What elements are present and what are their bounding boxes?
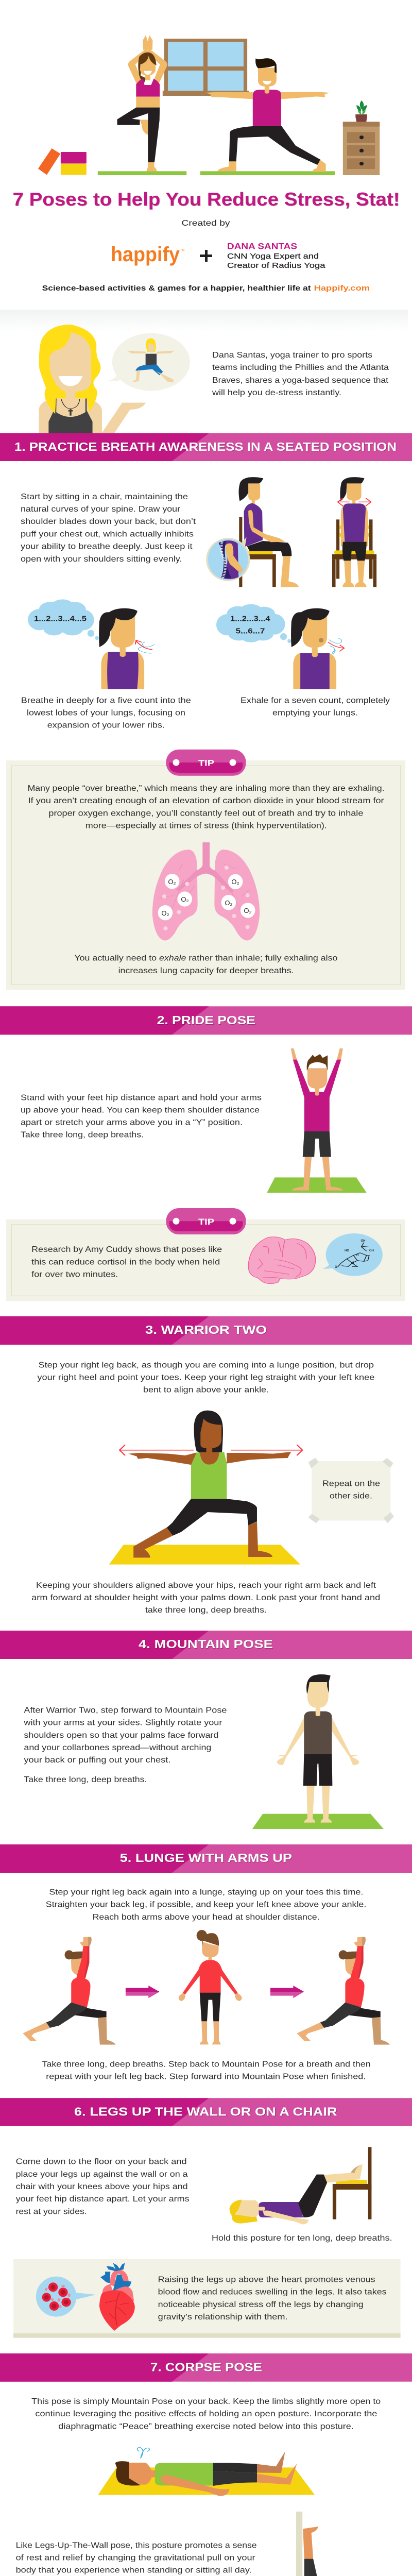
- corpse pose instructions: This pose is simply Mountain Pose on your back. Keep the limbs slightly more open to: [31, 2397, 381, 2406]
- section 1 instructions: puff your chest out, which actually inhibits: [21, 530, 194, 539]
- banner: section 2: 2. PRIDE POSE: [157, 1013, 255, 1027]
- seated figure, side view: [239, 477, 299, 587]
- intro text: Braves, shares a yoga-based sequence that: [212, 376, 389, 385]
- banner: section 4: 4. MOUNTAIN POSE: [139, 1637, 273, 1651]
- Dana Santas credit: [227, 241, 325, 270]
- lunge instructions: Straighten your back leg, if possible, and keep your left knee above your ankle.: [46, 1901, 366, 1909]
- Dana Santas credit: CNN Yoga Expert and: [227, 252, 319, 261]
- warrior two instructions: bent to align above your ankle.: [143, 1386, 269, 1395]
- sticky note: other side.: [330, 1492, 372, 1500]
- mountain pose instructions: and your collarbones spread—without arching: [24, 1743, 211, 1752]
- pride pose instructions: Stand with your feet hip distance apart and hold your arms: [21, 1093, 262, 1102]
- tip badge: TIP: [198, 758, 214, 768]
- warrior two follow-up: Keeping your shoulders aligned above your hips, reach your right arm back and left: [36, 1581, 376, 1590]
- lungs diagram: O₂: [168, 878, 176, 886]
- corpse pose instructions: continue leveraging the positive effects of holding an open posture. Incorporate the: [35, 2410, 377, 2418]
- mountain pose instructions: your back or puffing out your chest.: [24, 1756, 170, 1765]
- banner: section 1: [0, 433, 412, 461]
- banner: section 7: [0, 2353, 412, 2382]
- banner: section 3: 3. WARRIOR TWO: [145, 1323, 267, 1336]
- warrior two follow-up: [31, 1581, 380, 1615]
- intro text: [212, 351, 389, 397]
- mountain pose instructions: shoulders open so that your palms face forward: [24, 1731, 218, 1740]
- banner: section 7: 7. CORPSE POSE: [150, 2361, 262, 2374]
- happify logo: TM: [180, 249, 184, 252]
- yoga blocks: [38, 148, 87, 175]
- tagline: Happify.com: [314, 284, 370, 293]
- brain icon and cortisol bubble: OH: [369, 1249, 374, 1252]
- created by: Created by: [181, 219, 230, 228]
- lungs diagram: O₂: [244, 907, 252, 914]
- warrior two follow-up: take three long, deep breaths.: [145, 1606, 267, 1615]
- lunge instructions: [46, 1888, 366, 1922]
- lunge follow-up: repeat with your left leg back. Step forward into Mountain Pose when finished.: [46, 2073, 366, 2081]
- mountain pose instructions: [23, 1706, 227, 1784]
- count labels: 1...2...3...4...5: [34, 614, 87, 623]
- window: [163, 39, 249, 96]
- warrior two instructions: [37, 1361, 375, 1395]
- man in warrior pose: [205, 58, 330, 172]
- inhale caption: lowest lobes of your lungs, focusing on: [27, 709, 185, 718]
- banner: section 6: 6. LEGS UP THE WALL OR ON A CHAIR: [74, 2105, 337, 2119]
- corpse pose instructions: diaphragmatic “Peace” breathing exercise noted below into this posture.: [58, 2422, 354, 2431]
- corpse pose figure on mat: [98, 2447, 315, 2496]
- hold caption: Hold this posture for ten long, deep breaths.: [212, 2234, 392, 2243]
- lungs diagram: O₂: [225, 899, 233, 907]
- tip text: [31, 1245, 222, 1279]
- banner: section 4: [0, 1631, 412, 1659]
- brain icon and cortisol bubble: H: [352, 1262, 354, 1265]
- banner: section 5: 5. LUNGE WITH ARMS UP: [120, 1851, 292, 1865]
- legs up instructions: [16, 2158, 190, 2216]
- happify logo: happify: [111, 243, 180, 266]
- tip badge: TIP: [198, 1217, 214, 1227]
- exhale caption: [241, 696, 390, 718]
- mountain pose instructions: After Warrior Two, step forward to Mountain Pose: [24, 1706, 227, 1715]
- mountain pose instructions: Take three long, deep breaths.: [24, 1775, 147, 1784]
- seated figure, front view: [332, 477, 376, 587]
- wall pose text: [16, 2541, 257, 2575]
- credits: happify and Dana Santas: [111, 241, 325, 270]
- pride pose instructions: apart or stretch your arms above you in a “Y” position.: [21, 1118, 243, 1127]
- tip text: Many people “over breathe,” which means they are inhaling more than they are exhaling.: [28, 784, 385, 793]
- tip conclusion: [74, 954, 338, 975]
- sticky note: [308, 1458, 394, 1523]
- hero illustration: yoga couple in room: [38, 35, 380, 175]
- exhale caption: emptying your lungs.: [272, 709, 358, 718]
- mountain pose instructions: with your arms at your sides. Slightly rotate your: [23, 1719, 222, 1727]
- sequence arrow: [126, 1986, 160, 1998]
- banner: section 1: 1. PRACTICE BREATH AWARENESS IN A SEATED POSITION: [14, 440, 397, 453]
- legs up instructions: Come down to the floor on your back and: [16, 2158, 187, 2166]
- dresser with plant: [343, 100, 380, 175]
- tip panel: over-breathing: [6, 750, 405, 990]
- tagline: Science-based activities & games for a happier, healthier life at: [42, 284, 311, 293]
- lungs diagram: O₂: [161, 909, 169, 917]
- tip badge: [166, 750, 246, 776]
- lungs diagram: [152, 842, 260, 941]
- section 1 instructions: your ability to breathe deeply. Just keep it: [21, 543, 193, 551]
- tip text: [28, 784, 385, 830]
- brain icon and cortisol bubble: HO: [345, 1249, 349, 1252]
- pride pose instructions: [21, 1093, 262, 1140]
- legs on chair figure: [229, 2147, 371, 2224]
- legs up instructions: place your legs up against the wall or on a: [16, 2170, 188, 2179]
- section 1 instructions: shoulder blades down your back, but don’t: [21, 517, 196, 526]
- count labels: 5...6...7: [236, 626, 265, 635]
- tip text: proper oxygen exchange, you’ll constantly feel out of breath and try to inhale: [48, 809, 364, 818]
- tip conclusion: increases lung capacity for deeper breaths.: [118, 967, 294, 975]
- title: 7 Poses to Help You Reduce Stress, Stat!: [12, 189, 400, 210]
- intro text: teams including the Phillies and the Atlanta: [212, 363, 389, 372]
- tip badge: [166, 1208, 246, 1234]
- lunge follow-up: Take three long, deep breaths. Step back to Mountain Pose for a breath and then: [42, 2060, 371, 2069]
- wall pose text: of rest and relief by changing the gravitational pull on your: [16, 2554, 255, 2563]
- lungs diagram: O₂: [231, 878, 239, 886]
- banner: section 5: [0, 1844, 412, 1873]
- legs up instructions: rest at your sides.: [16, 2207, 87, 2216]
- exhale caption: Exhale for a seven count, completely: [241, 696, 390, 705]
- lunge figure, right leg back: [23, 1937, 115, 2045]
- banner: section 6: [0, 2098, 412, 2126]
- inhale caption: Breathe in deeply for a five count into the: [21, 696, 191, 705]
- warrior two instructions: Step your right leg back, as though you are coming into a lunge position, but drop: [38, 1361, 374, 1369]
- pride pose instructions: up above your head. You can keep them shoulder distance: [21, 1106, 260, 1114]
- lunge instructions: Reach both arms above your head at shoulder distance.: [93, 1913, 320, 1922]
- lungs diagram: O₂: [181, 895, 189, 903]
- brain icon and cortisol bubble: [248, 1233, 383, 1284]
- legs up the wall figure: [296, 2512, 397, 2576]
- heart and blood cells: [36, 2263, 135, 2331]
- lunge figure, left leg back: [297, 1937, 390, 2045]
- seated figures and breathing diagrams: [28, 477, 376, 689]
- brain icon and cortisol bubble: OH: [360, 1240, 366, 1243]
- tip text: for over two minutes.: [31, 1270, 118, 1279]
- section 1 instructions: [21, 493, 196, 564]
- plus sign: [200, 250, 212, 262]
- blood flow text: blood flow and reduces swelling in the legs. It also takes: [158, 2288, 387, 2297]
- inhale: thought bubble and figure: [28, 599, 154, 689]
- wall pose text: body that you experience when standing or sitting all day.: [16, 2566, 252, 2575]
- sequence arrow: [270, 1986, 304, 1998]
- blood flow text: noticeable physical stress off the legs by changing: [158, 2300, 364, 2309]
- Dana Santas illustration: [39, 325, 190, 433]
- warrior two follow-up: arm forward at shoulder height with your palms down. Look past your front hand and: [31, 1594, 380, 1602]
- count labels: 1...2...3...4: [230, 614, 270, 623]
- banner: section 2: [0, 1006, 412, 1035]
- woman in tree pose: [117, 35, 167, 171]
- tip conclusion: You actually need to exhale rather than inhale; fully exhaling also: [74, 954, 338, 963]
- legs up instructions: your feet hip distance apart. Let your arms: [16, 2195, 190, 2204]
- legs up instructions: chair with your knees above your hips and: [16, 2182, 188, 2191]
- intro text: will help you de-stress instantly.: [212, 388, 341, 397]
- panel: blood flow: [13, 2259, 401, 2338]
- exhale: thought bubble and figure: [216, 604, 344, 689]
- intro panel gradient: [0, 310, 408, 331]
- Dana Santas credit: Creator of Radius Yoga: [227, 261, 325, 270]
- pride pose figure: [267, 1048, 367, 1193]
- blood flow text: Raising the legs up above the heart promotes venous: [158, 2276, 375, 2284]
- wall pose text: Like Legs-Up-The-Wall pose, this posture promotes a sense: [16, 2541, 257, 2550]
- section 1 instructions: open with your shoulders sitting evenly.: [21, 555, 182, 564]
- corpse pose instructions: [31, 2397, 381, 2431]
- warrior two figure: [109, 1411, 302, 1565]
- tip text: If you aren’t creating enough of an elevation of carbon dioxide in your blood stream for: [28, 796, 384, 805]
- section 1 instructions: Start by sitting in a chair, maintaining the: [21, 493, 188, 501]
- tip text: more—especially at times of stress (think hyperventilation).: [85, 821, 327, 830]
- intro text: Dana Santas, yoga trainer to pro sports: [212, 351, 372, 360]
- brain icon and cortisol bubble: O: [335, 1266, 337, 1269]
- speech bubble with warrior pose: [107, 333, 190, 391]
- count labels: [34, 614, 270, 635]
- blood flow text: [158, 2276, 387, 2321]
- blood flow text: gravity’s relationship with them.: [158, 2313, 288, 2321]
- lunge follow-up: [42, 2060, 371, 2081]
- sticky note: Repeat on the: [322, 1479, 380, 1488]
- pride pose instructions: Take three long, deep breaths.: [21, 1131, 144, 1140]
- standing figure: [179, 1930, 242, 2044]
- tip text: this can reduce cortisol in the body when held: [31, 1258, 220, 1266]
- lunge sequence: [23, 1930, 390, 2045]
- section 1 instructions: natural curves of your spine. Draw your: [21, 505, 181, 514]
- lunge instructions: Step your right leg back again into a lunge, staying up on your toes this time.: [49, 1888, 363, 1897]
- yoga mats: [98, 171, 335, 175]
- Dana Santas credit: DANA SANTAS: [227, 241, 297, 251]
- inhale caption: [21, 696, 191, 730]
- tip panel: cortisol: [6, 1208, 405, 1301]
- inhale caption: expansion of your lower ribs.: [47, 721, 165, 730]
- mountain pose figure: [252, 1674, 384, 1829]
- banner: section 3: [0, 1316, 412, 1345]
- spine callout: [207, 537, 249, 581]
- stretch arrows: [119, 1445, 302, 1455]
- tip text: Research by Amy Cuddy shows that poses like: [31, 1245, 222, 1254]
- warrior two instructions: your right heel and point your toes. Keep your right leg straight with your left knee: [37, 1374, 375, 1382]
- brain icon and cortisol bubble: H: [356, 1254, 358, 1257]
